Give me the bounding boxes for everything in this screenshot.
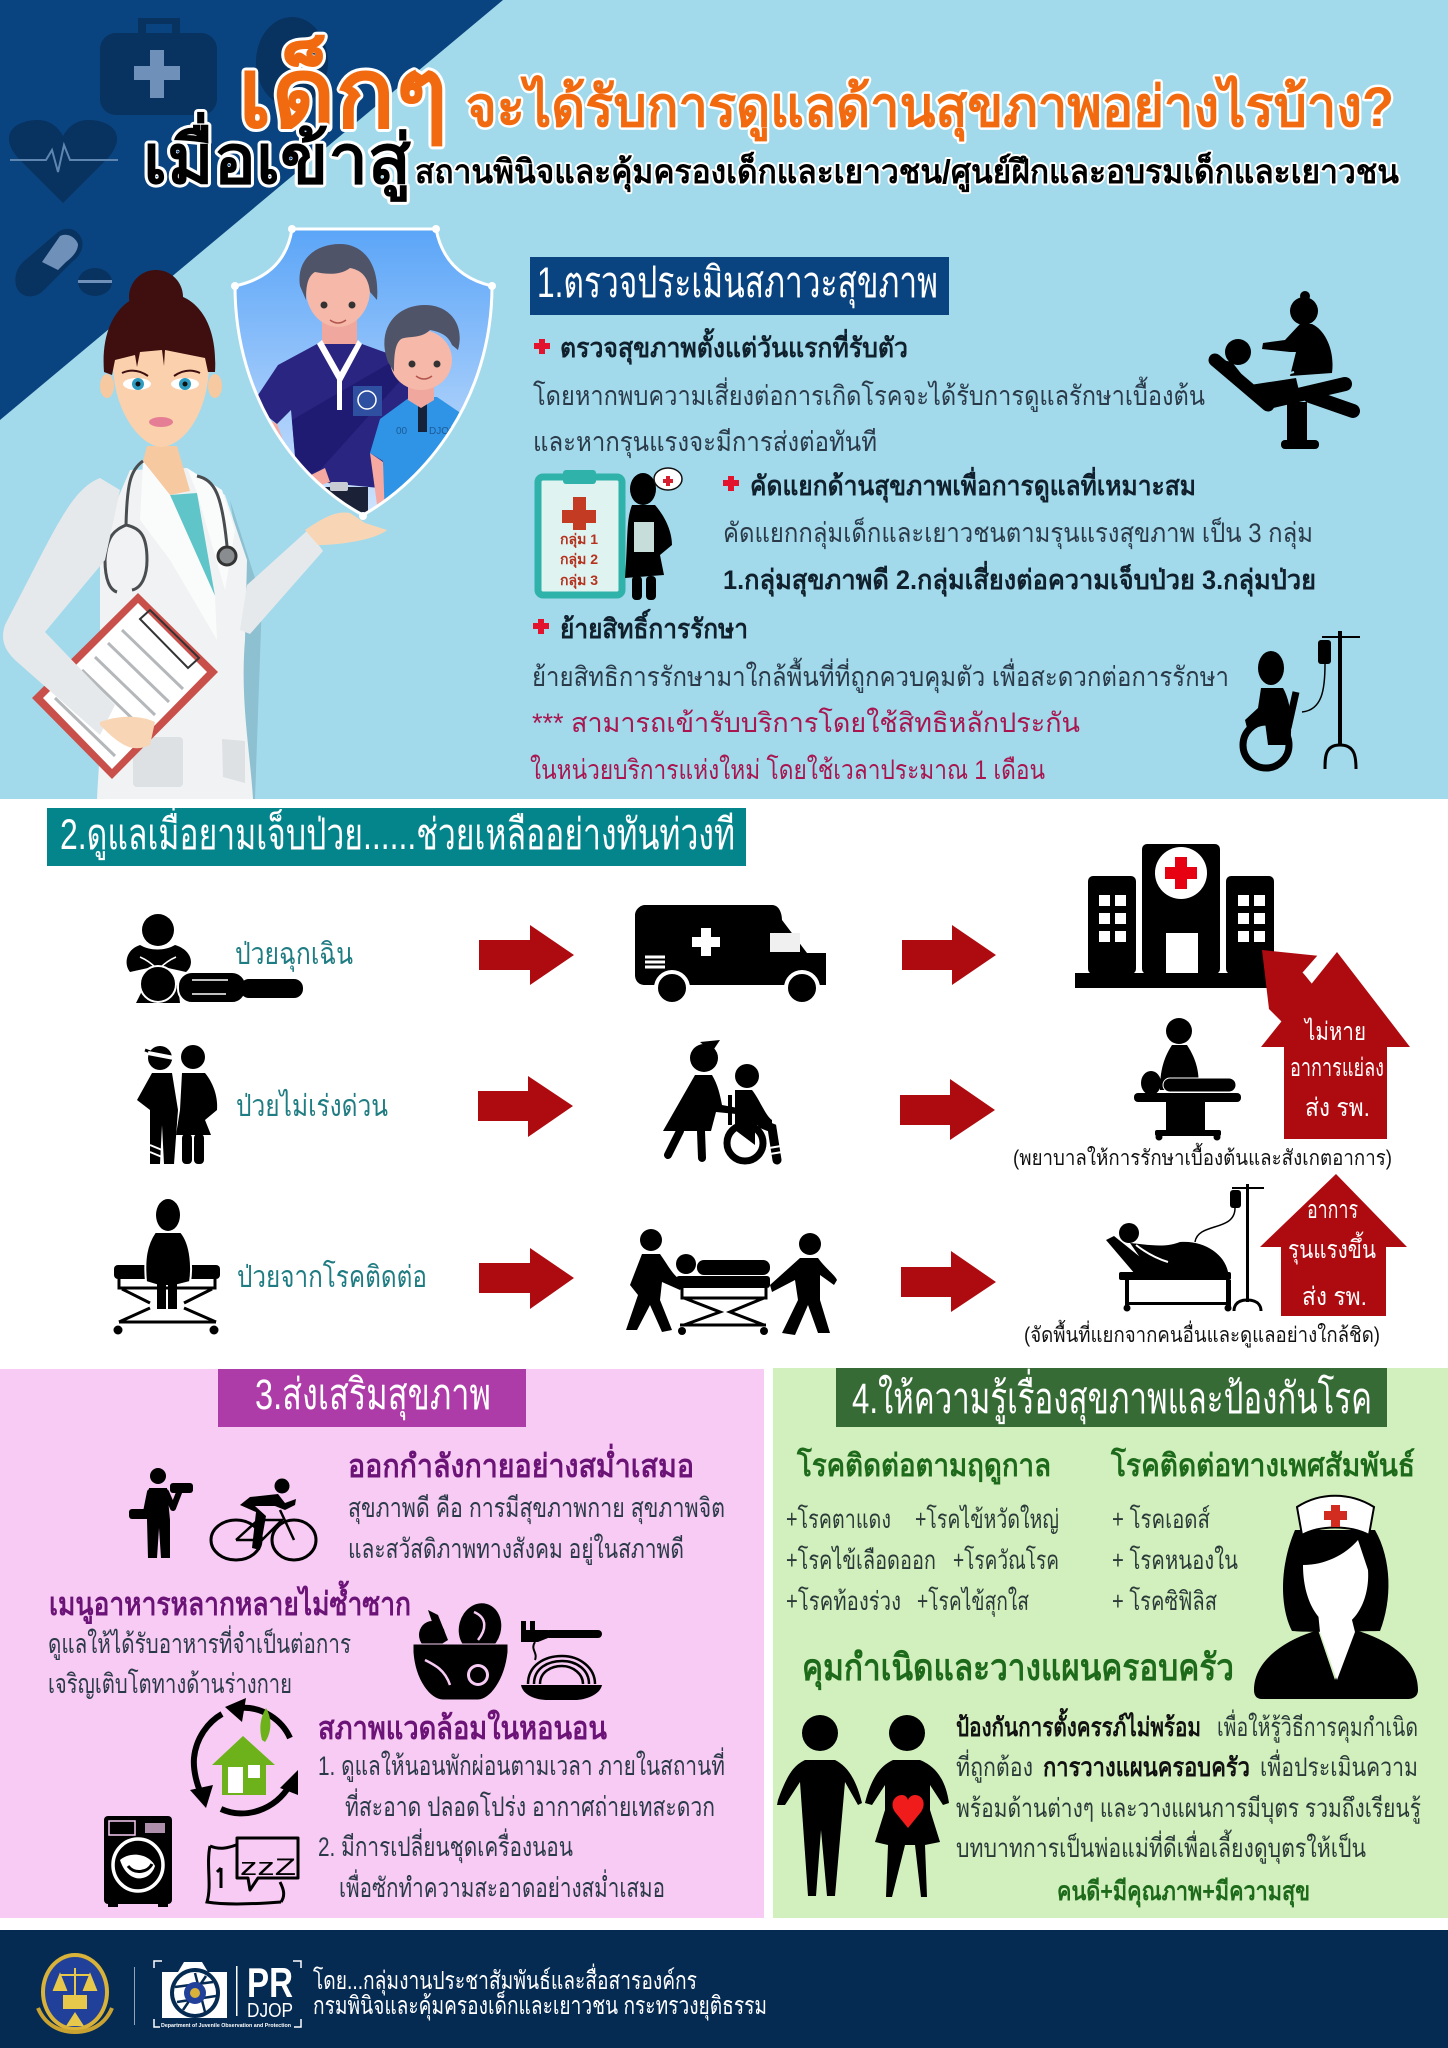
list: sexually transmitted diseases: + โรคซิฟิลิส	[1112, 1586, 1217, 1616]
list: seasonal diseases: +โรคไข้สุกใส	[917, 1586, 1029, 1617]
icon: nurse bust	[1254, 1496, 1418, 1699]
heading: section 2: 2.ดูแลเมื่อยามเจ็บป่วย......ช่วยเหลืออย่างทันท่วงที	[60, 805, 735, 861]
heading: section 3: 3.ส่งเสริมสุขภาพ	[255, 1371, 491, 1421]
arrow: row 3 to isolation	[901, 1251, 996, 1312]
text: exercise: สุขภาพดี คือ การมีสุขภาพกาย สุขภาพจิต	[348, 1493, 725, 1525]
arrow: row 2 to nurse	[478, 1076, 573, 1137]
text: family planning paragraph: ป้องกันการตั้งครรภ์ไม่พร้อม	[956, 1707, 1201, 1742]
icon: stretcher carried by two people	[626, 1229, 837, 1335]
logo: PR DJOP camera: Department of Juvenile Observation and Protection	[161, 2023, 291, 2029]
logo: PR DJOP camera: DJOP	[247, 2000, 293, 2022]
icon: nurse holding clipboard	[625, 468, 682, 600]
heading: section 2	[47, 805, 746, 866]
text: exercise	[348, 1443, 725, 1565]
panel: section 1 health assessment	[530, 257, 1360, 785]
arrow: worse, send to hospital: ส่ง รพ.	[1302, 1283, 1367, 1311]
logo: PR DJOP camera: PR	[247, 1959, 293, 2006]
icon: recycling arrows and green house	[190, 1698, 298, 1813]
arrow: worse, send to hospital	[1260, 1174, 1407, 1316]
heading: section 1: 1.ตรวจประเมินสภาวะสุขภาพ	[537, 259, 938, 309]
logo: PR DJOP camera	[154, 1959, 301, 2029]
arrow: not recovered, send to hospital: ไม่หาย	[1303, 1017, 1366, 1046]
illustration: doctor with clipboard	[3, 270, 387, 799]
title: entering: เมื่อเข้าสู่	[143, 111, 412, 203]
text: credit: กรมพินิจและคุ้มครองเด็กและเยาวชน กระทรวงยุติธรรม	[313, 1990, 767, 2021]
logo: ministry seal	[38, 1953, 112, 2032]
icon: stethoscope	[105, 461, 236, 592]
text: exercise: ออกกำลังกายอย่างสม่ำเสมอ	[348, 1443, 694, 1484]
text: family goal: คนดี+มีคุณภาพ+มีความสุข	[1057, 1876, 1310, 1908]
text: dormitory environment	[318, 1709, 725, 1903]
icon: isolated patient with IV	[1106, 1184, 1264, 1312]
list: seasonal diseases: +โรคไข้หวัดใหญ่	[915, 1504, 1059, 1534]
text: risk description: และหากรุนแรงจะมีการส่งต่อทันที	[533, 427, 877, 459]
text: dormitory environment: 1. ดูแลให้นอนพักผ่อนตามเวลา ภายในสถานที่	[318, 1747, 725, 1782]
arrow: row 3 to stretcher	[479, 1248, 574, 1309]
icon: couple with heart	[777, 1715, 949, 1897]
text: dormitory environment: สภาพแวดล้อมในหอนอน	[318, 1709, 607, 1746]
list: seasonal diseases	[786, 1447, 1059, 1617]
arrow: row 1 to ambulance	[479, 925, 574, 985]
arrow: worse, send to hospital: อาการ	[1307, 1196, 1358, 1224]
text: non urgent: ป่วยไม่เร่งด่วน	[236, 1088, 388, 1123]
text: family planning paragraph: การวางแผนครอบครัว	[1043, 1752, 1250, 1782]
footer	[0, 1930, 1448, 2048]
heading: section 3	[218, 1369, 526, 1427]
icon: hospital	[1075, 844, 1274, 988]
heading: family planning: คุมกำเนิดและวางแผนครอบครัว	[802, 1647, 1234, 1691]
text: risk description: โดยหากพบความเสี่ยงต่อการเกิดโรคจะได้รับการดูแลรักษาเบื้องต้น	[533, 376, 1205, 412]
text: family planning paragraph: บทบาทการเป็นพ่อแม่ที่ดีเพื่อเลี้ยงดูบุตรให้เป็น	[956, 1829, 1366, 1864]
list: seasonal diseases: +โรควัณโรค	[953, 1545, 1059, 1575]
list: seasonal diseases: +โรคไข้เลือดออก	[786, 1545, 936, 1575]
text: crimson note: *** สามารถเข้ารับบริการโดยใช้สิทธิหลักประกัน	[532, 707, 1080, 738]
text: dormitory environment: 2. มีการเปลี่ยนชุดเครื่องนอน	[318, 1828, 573, 1864]
icon: washing machine	[104, 1816, 172, 1907]
icon: faded medical kit	[100, 17, 328, 115]
title: institutions line: สถานพินิจและคุ้มครองเด็กและเยาวชน/ศูนย์ฝึกและอบรมเด็กและเยาวชน	[415, 151, 1399, 193]
panel: section 2 illness care	[0, 799, 1448, 1369]
arrow: not recovered, send to hospital: อาการแย่ลง	[1290, 1054, 1384, 1082]
heading: section 1	[530, 257, 949, 315]
icon: ambulance	[635, 905, 826, 1004]
text: family planning paragraph	[956, 1707, 1421, 1864]
icon: faded capsule and tablet	[15, 229, 112, 296]
icon: clipboard with three groups	[538, 470, 622, 595]
arrow: not recovered, send to hospital: ส่ง รพ.	[1305, 1094, 1370, 1122]
text: triage groups: 1.กลุ่มสุขภาพดี 2.กลุ่มเสี่ยงต่อความเจ็บป่วย 3.กลุ่มป่วย	[723, 560, 1316, 597]
list: seasonal diseases: โรคติดต่อตามฤดูกาล	[796, 1447, 1051, 1485]
icon: red bullet 3	[533, 619, 549, 634]
text: crimson note: ในหน่วยบริการแห่งใหม่ โดยใช้เวลาประมาณ 1 เดือน	[530, 754, 1045, 785]
panel: section 4 health education	[773, 1368, 1448, 1918]
list: seasonal diseases: +โรคท้องร่วง	[786, 1586, 901, 1616]
text: triage heading: คัดแยกด้านสุขภาพเพื่อการดูแลที่เหมาะสม	[750, 466, 1196, 503]
illustration: shield with officer and boy: DJOP	[429, 426, 456, 437]
text: credit: โดย...กลุ่มงานประชาสัมพันธ์และสื่อสารองค์กร	[313, 1963, 697, 1996]
text: family planning paragraph: เพื่อประเมินความ	[1260, 1749, 1418, 1782]
list: seasonal diseases: +โรคตาแดง	[786, 1504, 891, 1534]
icon: red bullet 2	[723, 476, 739, 491]
text: transfer rights description: ย้ายสิทธิการรักษามาใกล้พื้นที่ที่ถูกควบคุมตัว เพื่อสะดวกต่อการรักษา	[532, 657, 1229, 694]
text: dormitory environment: เพื่อซักทำความสะอาดอย่างสม่ำเสมอ	[339, 1869, 665, 1903]
text: isolation caption: (จัดพื้นที่แยกจากคนอื่นและดูแลอย่างใกล้ชิด)	[1024, 1320, 1380, 1348]
text: risk description	[533, 376, 1205, 459]
icon: injured person with nurse	[137, 1045, 217, 1164]
icon: clipboard held by doctor	[32, 593, 218, 779]
icon: nurse examining patient	[1212, 291, 1353, 449]
text: infectious disease: ป่วยจากโรคติดต่อ	[237, 1259, 427, 1294]
illustration: shield with officer and boy	[231, 225, 496, 520]
text: family planning paragraph: ที่ถูกต้อง	[956, 1749, 1033, 1783]
title: children: เด็กๆ	[238, 34, 448, 148]
icon: clipboard with three groups: กลุ่ม 2	[560, 551, 598, 568]
panel: section 1 background	[0, 0, 1448, 799]
text: first aid caption: (พยาบาลให้การรักษาเบื้องต้นและสังเกตอาการ)	[1013, 1143, 1392, 1170]
text: exercise: และสวัสดิภาพทางสังคม อยู่ในสภาพดี	[348, 1533, 684, 1565]
icon: clipboard with three groups: กลุ่ม 3	[560, 572, 598, 589]
icon: cyclist	[211, 1478, 316, 1560]
icon: nurse pushing wheelchair	[663, 1040, 782, 1161]
list: sexually transmitted diseases: + โรคเอดส์	[1112, 1504, 1210, 1534]
arrow: worse, send to hospital: รุนแรงขึ้น	[1288, 1231, 1376, 1265]
icon: red bullet 1	[534, 339, 550, 354]
icon: pillow and zzz bubble	[207, 1838, 298, 1904]
text: varied food: เมนูอาหารหลากหลายไม่ซ้ำซาก	[49, 1580, 411, 1625]
icon: person on exam bed	[114, 1199, 220, 1334]
panel: section 3 health promotion	[0, 1369, 764, 1918]
icon: patient in wheelchair with IV	[1243, 631, 1360, 769]
icon: nurse treating patient on bed	[1134, 1018, 1241, 1140]
text: dormitory environment: ที่สะอาด ปลอดโปร่ง อากาศถ่ายเทสะดวก	[345, 1788, 715, 1822]
icon: emergency CPR	[127, 914, 303, 1003]
list: sexually transmitted diseases: + โรคหนองใน	[1112, 1545, 1238, 1575]
text: varied food	[48, 1580, 411, 1699]
text: triage groups	[723, 515, 1316, 597]
text: transfer rights heading: ย้ายสิทธิ์การรักษา	[560, 609, 748, 644]
text: crimson note	[530, 707, 1080, 785]
icon: pillow and zzz bubble: zzZ	[240, 1854, 296, 1881]
text: credit	[313, 1963, 767, 2021]
text: triage groups: คัดแยกกลุ่มเด็กและเยาวชนตามรุนแรงสุขภาพ เป็น 3 กลุ่ม	[723, 515, 1313, 550]
icon: noodles and fork	[521, 1621, 602, 1700]
text: check health from day one: ตรวจสุขภาพตั้งแต่วันแรกที่รับตัว	[560, 327, 908, 365]
icon: salad bowl	[413, 1598, 508, 1700]
arrow: row 1 to hospital	[902, 925, 996, 985]
arrow: row 2 to nursing	[900, 1079, 995, 1140]
icon: person lifting dumbbells	[129, 1468, 193, 1558]
text: emergency: ป่วยฉุกเฉิน	[235, 938, 353, 973]
doctor head	[100, 270, 222, 447]
icon: clipboard with three groups: กลุ่ม 1	[560, 531, 598, 548]
text: varied food: ดูแลให้ได้รับอาหารที่จำเป็นต่อการ	[48, 1625, 351, 1660]
illustration: shield with officer and boy: 00	[396, 426, 408, 437]
arrow: not recovered, send to hospital	[1261, 950, 1410, 1139]
icon: faded heart with pulse	[9, 120, 118, 203]
text: varied food: เจริญเติบโตทางด้านร่างกาย	[48, 1669, 292, 1699]
list: sexually transmitted diseases	[1110, 1447, 1415, 1616]
title	[143, 34, 1399, 203]
title: question line: จะได้รับการดูแลด้านสุขภาพอย่างไรบ้าง?	[466, 74, 1394, 142]
list: sexually transmitted diseases: โรคติดต่อทางเพศสัมพันธ์	[1110, 1447, 1415, 1483]
